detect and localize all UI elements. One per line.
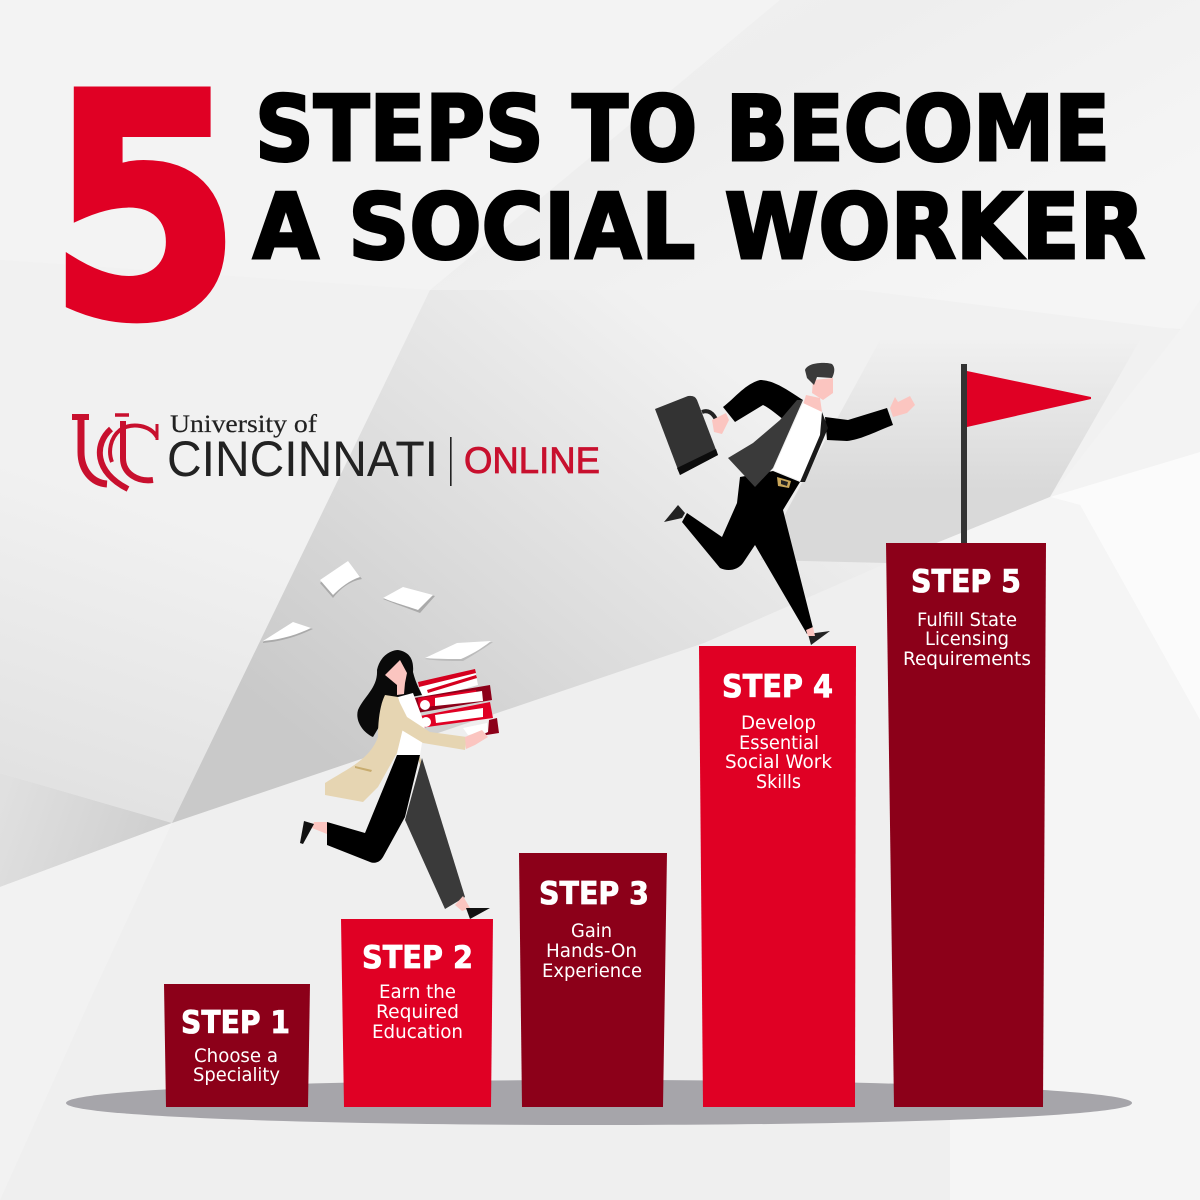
step 3 description: Gain bbox=[571, 920, 612, 942]
logo text: University of: University of bbox=[170, 411, 318, 438]
step 3 description: Experience bbox=[542, 960, 642, 982]
step 2 heading: STEP 2 bbox=[362, 940, 473, 976]
flying papers bbox=[263, 561, 493, 661]
logo text: Cincinnati: CINCINNATI bbox=[167, 431, 438, 487]
icon: red flag bbox=[961, 364, 1091, 543]
step 2 description: Earn the bbox=[379, 981, 456, 1003]
illustration: woman carrying binders bbox=[300, 650, 499, 919]
illustration: running man with briefcase bbox=[655, 363, 915, 645]
step 4 bar bbox=[699, 646, 856, 1107]
step 3 description: Hands-On bbox=[546, 940, 637, 962]
step 5 description bbox=[903, 609, 1031, 670]
hair bbox=[357, 650, 422, 737]
step 3 description bbox=[542, 920, 642, 982]
ground shadow bbox=[66, 1080, 1132, 1125]
step 1 description: Choose a bbox=[194, 1045, 278, 1067]
step 5 description: Fulfill State bbox=[917, 609, 1017, 631]
step 3 heading: STEP 3 bbox=[539, 876, 649, 912]
step 5 description: Requirements bbox=[903, 648, 1031, 670]
step 1 description bbox=[193, 1045, 280, 1086]
icon: UC monogram bbox=[72, 415, 157, 489]
step 2 description bbox=[372, 981, 463, 1043]
step 4 heading: STEP 4 bbox=[722, 669, 833, 705]
step 4 description: Essential bbox=[739, 732, 819, 754]
briefcase bbox=[655, 396, 720, 475]
step 5 bar bbox=[886, 543, 1046, 1107]
title line 1: STEPS TO BECOME bbox=[255, 77, 1110, 182]
title line 2: A SOCIAL WORKER bbox=[253, 175, 1145, 280]
title bbox=[48, 29, 1145, 388]
step 2 description: Required bbox=[376, 1001, 459, 1023]
step 1 bar bbox=[164, 984, 310, 1107]
step 3 bar bbox=[519, 853, 667, 1107]
step 4 description: Develop bbox=[741, 712, 816, 734]
logo text: Online: ONLINE bbox=[464, 440, 600, 481]
step 5 description: Licensing bbox=[925, 628, 1009, 650]
step 2 bar bbox=[341, 919, 493, 1107]
logo: University of Cincinnati Online bbox=[72, 411, 600, 489]
step 4 description: Skills bbox=[756, 771, 801, 793]
step 4 description: Social Work bbox=[725, 751, 832, 773]
logo divider bbox=[450, 437, 452, 486]
step 4 description bbox=[725, 712, 832, 793]
large numeral 5: 5 bbox=[48, 29, 241, 388]
step 2 description: Education bbox=[372, 1021, 463, 1043]
binders bbox=[414, 669, 499, 736]
step 1 heading: STEP 1 bbox=[181, 1005, 290, 1041]
step 5 heading: STEP 5 bbox=[911, 564, 1021, 600]
step 1 description: Speciality bbox=[193, 1064, 280, 1086]
